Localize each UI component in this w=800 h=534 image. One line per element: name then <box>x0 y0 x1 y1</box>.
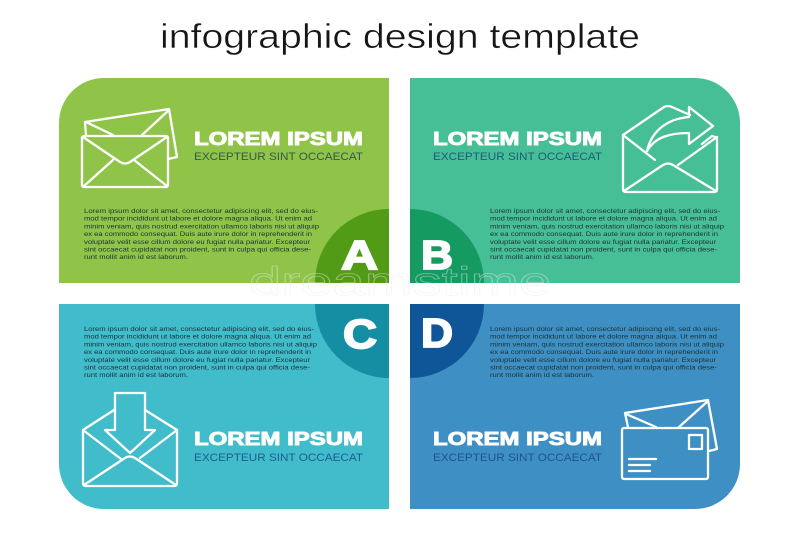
icon: two envelopes <box>82 109 177 187</box>
watermark: dreamstime <box>249 260 551 304</box>
body text: B: mod tempor incididunt ut labore et dolore magna aliqua. Ut enim ad <box>490 216 717 223</box>
panel: D <box>410 304 740 509</box>
title: infographic design template <box>160 18 640 56</box>
body text: B <box>490 208 724 261</box>
body text: B: Lorem ipsum dolor sit amet, consectetur adipiscing elit, sed do eius- <box>490 208 720 215</box>
badge: A <box>315 209 389 283</box>
body text: D: voluptate velit esse cillum dolore eu fugiat nulla pariatur. Excepteur <box>490 357 717 364</box>
body text: C: ex ea commodo consequat. Duis aute irure dolor in reprehenderit in <box>84 349 311 356</box>
badge: A: A <box>341 232 378 278</box>
body text: D: sint occaecat cupidatat non proident, sunt in culpa qui officia dese- <box>490 364 717 372</box>
heading: A: LOREM IPSUM <box>194 129 363 149</box>
body text: B: minim veniam, quis nostrud exercitation ullamco laboris nisi ut aliquip <box>490 223 724 230</box>
icon: open envelope with outgoing arrow <box>623 106 717 192</box>
panel: C <box>59 304 389 509</box>
panel: B <box>410 78 740 283</box>
body text: D <box>490 326 724 379</box>
body text: D: runt mollit anim id est laborum. <box>490 372 594 379</box>
body text: A: sint occaecat cupidatat non proident, sunt in culpa qui officia dese- <box>84 246 311 254</box>
icon: envelope with stamp <box>622 400 717 479</box>
badge: B <box>410 209 484 283</box>
body text: A <box>84 208 319 261</box>
heading: C: LOREM IPSUM <box>194 429 363 449</box>
body text: A: mod tempor incididunt ut labore et dolore magna aliqua. Ut enim ad <box>84 216 312 223</box>
body text: D: minim veniam, quis nostrud exercitation ullamco laboris nisi ut aliquip <box>490 341 724 348</box>
body text: D: mod tempor incididunt ut labore et dolore magna aliqua. Ut enim ad <box>490 334 717 341</box>
subheading: D: EXCEPTEUR SINT OCCAECAT <box>433 452 602 464</box>
body text: A: ex ea commodo consequat. Duis aute irure dolor in reprehenderit in <box>84 231 312 238</box>
badge: C: C <box>343 311 377 357</box>
body text: A: voluptate velit esse cillum dolore eu fugiat nulla pariatur. Excepteur <box>84 239 311 246</box>
badge: C <box>315 304 389 378</box>
body text: C: Lorem ipsum dolor sit amet, consectetur adipiscing elit, sed do eius- <box>84 326 314 333</box>
icon: open envelope with incoming arrow <box>83 393 177 486</box>
body text: C: voluptate velit esse cillum dolore eu fugiat nulla pariatur. Excepteur <box>84 357 311 364</box>
subheading: C: EXCEPTEUR SINT OCCAECAT <box>194 452 363 464</box>
body text: C: minim veniam, quis nostrud exercitation ullamco laboris nisi ut aliquip <box>84 341 317 348</box>
heading: B: LOREM IPSUM <box>433 129 602 149</box>
body text: A: Lorem ipsum dolor sit amet, consectetur adipiscing elit, sed do eius- <box>84 208 318 215</box>
body text: C <box>84 326 317 379</box>
body text: B: ex ea commodo consequat. Duis aute irure dolor in reprehenderit in <box>490 231 718 238</box>
subheading: B: EXCEPTEUR SINT OCCAECAT <box>433 151 602 163</box>
body text: C: runt mollit anim id est laborum. <box>84 372 188 379</box>
body text: B: voluptate velit esse cillum dolore eu fugiat nulla pariatur. Excepteur <box>490 239 717 246</box>
body text: A: minim veniam, quis nostrud exercitation ullamco laboris nisi ut aliquip <box>84 223 319 230</box>
body text: B: runt mollit anim id est laborum. <box>490 254 594 261</box>
body text: C: sint occaecat cupidatat non proident, sunt in culpa qui officia dese- <box>84 364 310 372</box>
heading: D: LOREM IPSUM <box>433 429 602 449</box>
panel: A <box>59 78 389 283</box>
body text: D: ex ea commodo consequat. Duis aute irure dolor in reprehenderit in <box>490 349 718 356</box>
body text: A: runt mollit anim id est laborum. <box>84 254 188 261</box>
body text: C: mod tempor incididunt ut labore et dolore magna aliqua. Ut enim ad <box>84 334 311 341</box>
badge: D: D <box>421 310 453 356</box>
subheading: A: EXCEPTEUR SINT OCCAECAT <box>194 151 363 163</box>
body text: D: Lorem ipsum dolor sit amet, consectetur adipiscing elit, sed do eius- <box>490 326 720 333</box>
badge: B: B <box>421 232 453 278</box>
badge: D <box>410 304 484 378</box>
body text: B: sint occaecat cupidatat non proident, sunt in culpa qui officia dese- <box>490 246 717 254</box>
